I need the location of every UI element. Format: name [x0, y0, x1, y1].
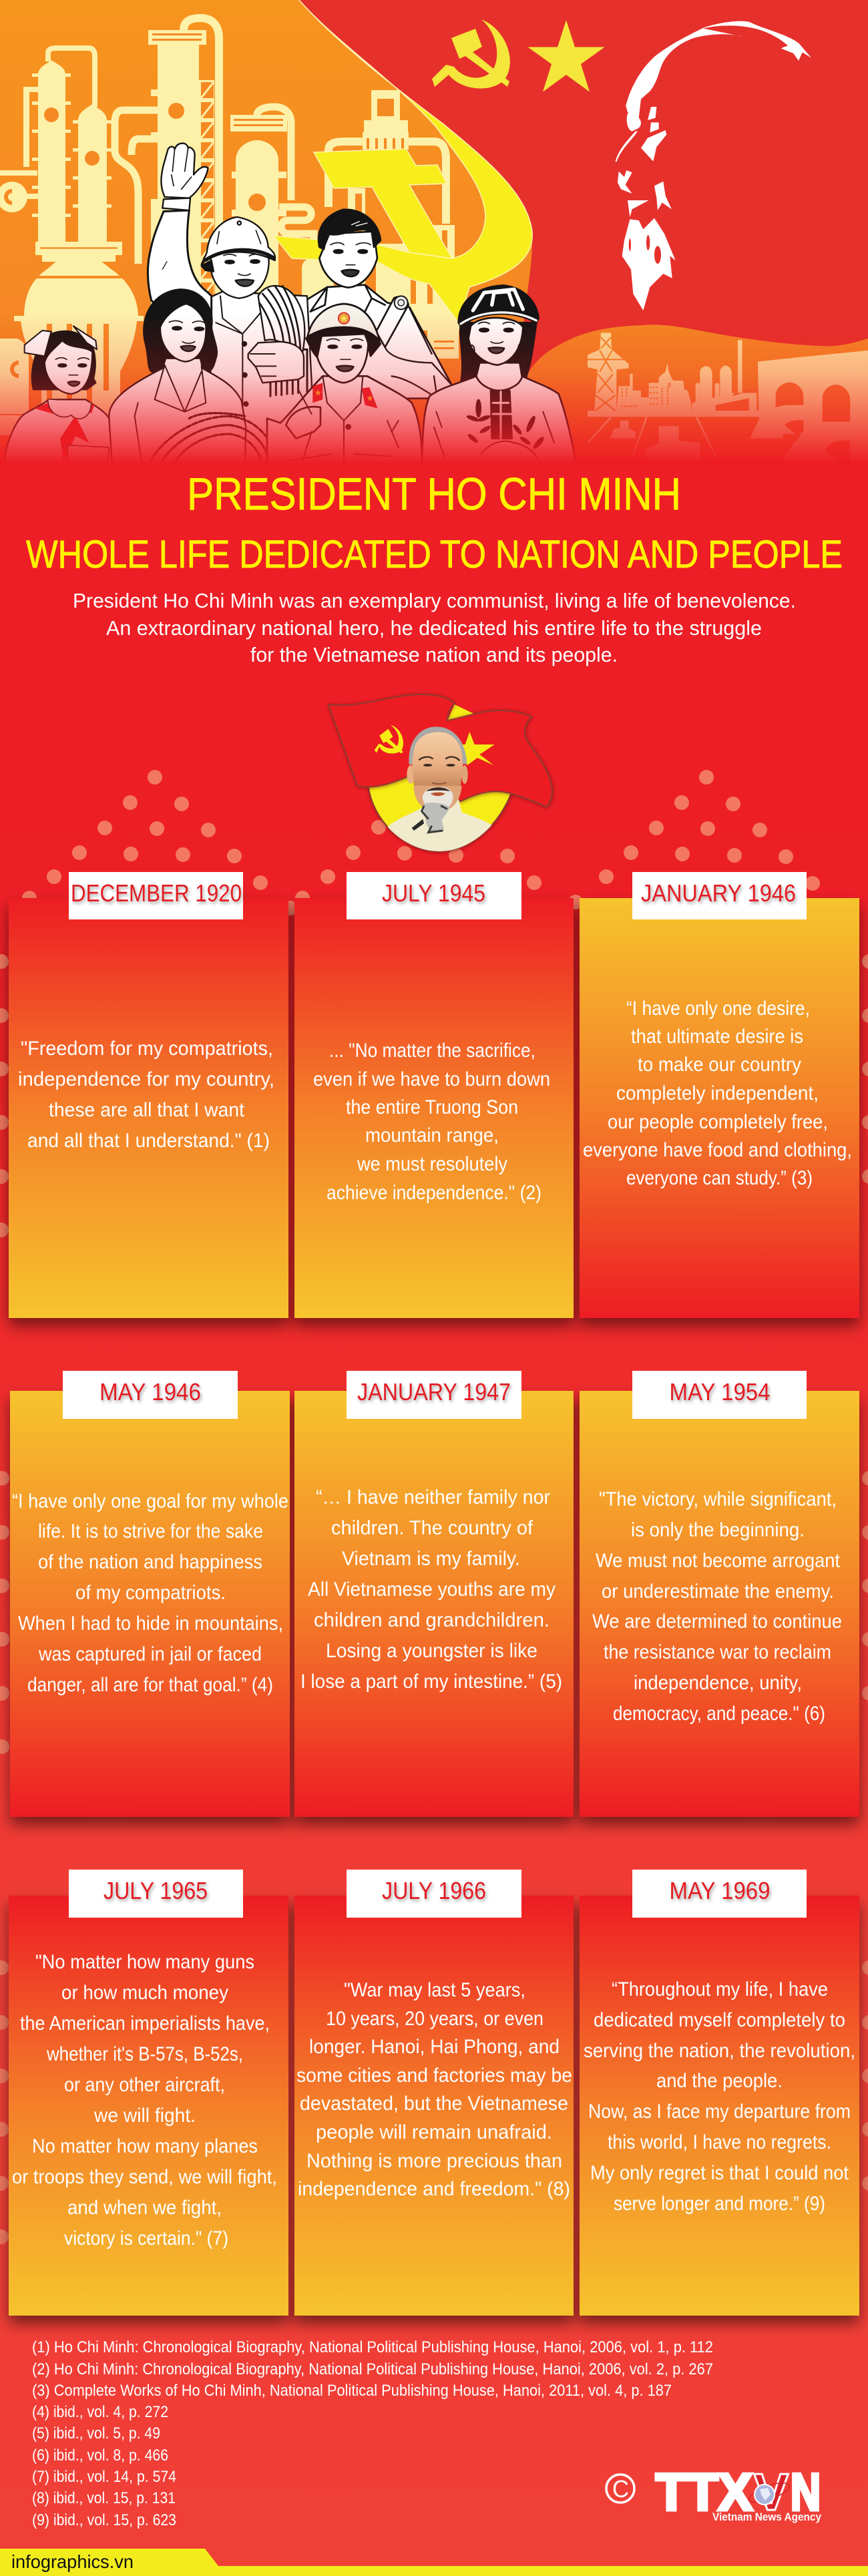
intro text: [73, 589, 796, 666]
quote: life. It is to strive for the sake: [38, 1520, 263, 1542]
date label: JULY 1945: [382, 879, 485, 907]
quote: My only regret is that I could not: [590, 2162, 849, 2184]
quote: [584, 1978, 855, 2215]
date label: [347, 872, 521, 919]
quote: serve longer and more.” (9): [614, 2193, 825, 2215]
quote: "No matter how many guns: [35, 1951, 254, 1973]
quote: We must not become arrogant: [596, 1550, 840, 1572]
quote: “I have only one desire,: [626, 998, 810, 1020]
quote: independence for my country,: [18, 1068, 274, 1090]
header fade to red: [0, 314, 868, 464]
quote: independence and freedom." (8): [298, 2178, 570, 2200]
quote: to make our country: [638, 1054, 801, 1076]
copyright and TTXVN logo: Vietnam News Agency: [712, 2511, 821, 2523]
quote: serving the nation, the revolution,: [584, 2040, 855, 2062]
panel: July 1965: [9, 1870, 288, 2316]
quote: and the people.: [656, 2070, 783, 2092]
footnotes: (6) ibid., vol. 8, p. 466: [32, 2446, 168, 2464]
date label: DECEMBER 1920: [71, 879, 242, 907]
quote: achieve independence." (2): [327, 1182, 541, 1204]
footnotes: (8) ibid., vol. 15, p. 131: [32, 2489, 176, 2507]
panel: December 1920: [9, 872, 288, 1318]
quote: children. The country of: [331, 1517, 533, 1539]
quote: [12, 1951, 277, 2249]
quote: independence, unity,: [634, 1672, 802, 1694]
icon: party hammer and sickle: [432, 19, 510, 88]
quote: “… I have neither family nor: [316, 1486, 550, 1508]
quote: or underestimate the enemy.: [602, 1580, 834, 1602]
quote: some cities and factories may be: [296, 2065, 572, 2087]
header illustration: [0, 0, 868, 467]
quote: 10 years, 20 years, or even: [326, 2008, 544, 2030]
quote: [18, 1038, 274, 1152]
quote: ... "No matter the sacrifice,: [329, 1040, 535, 1062]
person: young man with scroll: [295, 210, 452, 399]
footnotes: (1) Ho Chi Minh: Chronological Biography, National Political Publishing House, Hanoi, 2006, vol. 1, p. 112: [32, 2338, 713, 2356]
quote: All Vietnamese youths are my: [308, 1578, 556, 1600]
date label: [69, 872, 243, 919]
quote: of the nation and happiness: [38, 1551, 262, 1573]
copyright and TTXVN logo: V: [754, 2462, 789, 2521]
quote: completely independent,: [616, 1082, 819, 1104]
quote: Losing a youngster is like: [326, 1640, 537, 1662]
quote: [300, 1486, 562, 1693]
quote: democracy, and peace." (6): [613, 1703, 825, 1725]
quote: people will remain unafraid.: [316, 2121, 552, 2143]
footer source bar: [0, 2549, 868, 2576]
quote: We are determined to continue: [592, 1611, 842, 1633]
quote: I lose a part of my intestine.” (5): [300, 1671, 562, 1693]
footer source bar: infographics.vn: [11, 2551, 134, 2572]
panel: July 1966: [294, 1870, 574, 2316]
date label: JANUARY 1946: [641, 879, 796, 907]
footnotes: (2) Ho Chi Minh: Chronological Biography, National Political Publishing House, Hanoi, 2006, vol. 2, p. 267: [32, 2360, 713, 2378]
quote: everyone have food and clothing,: [583, 1139, 852, 1161]
quote: "War may last 5 years,: [344, 1979, 525, 2001]
footnotes: [32, 2338, 713, 2529]
quote: our people completely free,: [608, 1111, 828, 1133]
date label: JANUARY 1947: [357, 1378, 511, 1406]
right skyline: [588, 333, 868, 467]
quote: danger, all are for that goal.” (4): [27, 1674, 273, 1696]
card shadows: [9, 898, 859, 2316]
quote: [592, 1488, 842, 1725]
quote: everyone can study.” (3): [626, 1167, 813, 1189]
quote: these are all that I want: [49, 1099, 244, 1121]
quote: mountain range,: [365, 1124, 499, 1146]
quote: [12, 1490, 288, 1696]
footnotes: (9) ibid., vol. 15, p. 623: [32, 2511, 176, 2529]
copyright and TTXVN logo: C: [612, 2475, 629, 2503]
person: soldier with flag: [267, 304, 422, 467]
quote: Nothing is more precious than: [306, 2150, 562, 2172]
date label: [63, 1371, 238, 1419]
date label: JULY 1965: [103, 1877, 208, 1904]
date label: [632, 872, 807, 919]
quote: or any other aircraft,: [64, 2074, 225, 2096]
quote: of my compatriots.: [75, 1582, 226, 1604]
copyright and TTXVN logo: TTX: [656, 2462, 752, 2521]
person: young girl with scarf: [5, 326, 112, 467]
icon: large hammer and sickle: [274, 0, 532, 323]
quote: dedicated myself completely to: [594, 2009, 845, 2031]
quote: victory is certain." (7): [64, 2227, 228, 2249]
quote: “Throughout my life, I have: [612, 1978, 828, 2000]
panel: May 1969: [580, 1870, 859, 2316]
intro text: for the Vietnamese nation and its people.: [250, 643, 618, 666]
dotted triangles: [0, 770, 868, 2244]
panel: January 1946: [580, 872, 859, 1318]
quote: [583, 998, 852, 1189]
date label: [69, 1870, 243, 1918]
quote: this world, I have no regrets.: [608, 2131, 831, 2153]
footnotes: (3) Complete Works of Ho Chi Minh, National Political Publishing House, Hanoi, 2011, vol. 4, p. 187: [32, 2382, 672, 2400]
factory backdrop: [0, 18, 461, 435]
quote: that ultimate desire is: [631, 1026, 803, 1048]
panel: July 1945: [294, 872, 574, 1318]
quote: “I have only one goal for my whole: [12, 1490, 288, 1512]
date label: MAY 1946: [99, 1378, 201, 1406]
quote: "The victory, while significant,: [599, 1488, 837, 1510]
date label: MAY 1954: [669, 1378, 771, 1406]
quote: the entire Truong Son: [346, 1096, 518, 1118]
quote: we will fight.: [93, 2105, 196, 2127]
quote: [313, 1040, 550, 1204]
quote: No matter how many planes: [32, 2135, 258, 2157]
quote: was captured in jail or faced: [38, 1643, 262, 1665]
workers and people group: [5, 144, 576, 467]
quote: even if we have to burn down: [313, 1068, 550, 1090]
quote: the resistance war to reclaim: [604, 1641, 831, 1663]
panel: May 1954: [580, 1371, 859, 1817]
quote: and when we fight,: [67, 2197, 222, 2219]
quote: whether it's B-57s, B-52s,: [46, 2043, 243, 2065]
quote: "Freedom for my compatriots,: [21, 1038, 273, 1060]
copyright and TTXVN logo: [606, 2462, 821, 2523]
quote: is only the beginning.: [631, 1519, 805, 1541]
date label: JULY 1966: [382, 1877, 486, 1904]
person: ethnic minority woman: [422, 285, 576, 467]
title: [26, 469, 843, 576]
intro text: An extraordinary national hero, he dedicated his entire life to the struggle: [106, 616, 762, 640]
date label: [347, 1371, 521, 1419]
date label: [347, 1870, 521, 1918]
quote: longer. Hanoi, Hai Phong, and: [309, 2036, 560, 2058]
person: woman holding wheat: [109, 289, 278, 467]
quote: devastated, but the Vietnamese: [300, 2093, 568, 2115]
quote: children and grandchildren.: [314, 1609, 550, 1631]
quote: When I had to hide in mountains,: [18, 1613, 283, 1635]
footnotes: (4) ibid., vol. 4, p. 272: [32, 2403, 168, 2421]
copyright and TTXVN logo: N: [791, 2462, 821, 2521]
flag portrait medallion: [329, 694, 552, 851]
footnotes: (7) ibid., vol. 14, p. 574: [32, 2468, 176, 2486]
quote: and all that I understand." (1): [27, 1130, 270, 1152]
footnotes: (5) ibid., vol. 5, p. 49: [32, 2424, 160, 2442]
panel: January 1947: [294, 1371, 574, 1817]
panel: May 1946: [10, 1371, 290, 1817]
portrait silhouette: [616, 21, 811, 310]
title: PRESIDENT HO CHI MINH: [187, 469, 681, 519]
date label: [632, 1870, 807, 1918]
red flag field: [299, 0, 868, 374]
date label: MAY 1969: [669, 1877, 771, 1904]
date label: [632, 1371, 807, 1419]
intro text: President Ho Chi Minh was an exemplary communist, living a life of benevolence.: [73, 589, 796, 612]
quote: we must resolutely: [357, 1153, 507, 1175]
quote: or troops they send, we will fight,: [12, 2166, 277, 2188]
quote: the American imperialists have,: [20, 2012, 270, 2034]
icon: yellow star: [527, 20, 605, 92]
quote: Vietnam is my family.: [342, 1548, 520, 1570]
quote: or how much money: [61, 1982, 228, 2004]
quote: [296, 1979, 572, 2200]
person: raised arm worker in helmet: [148, 144, 316, 467]
